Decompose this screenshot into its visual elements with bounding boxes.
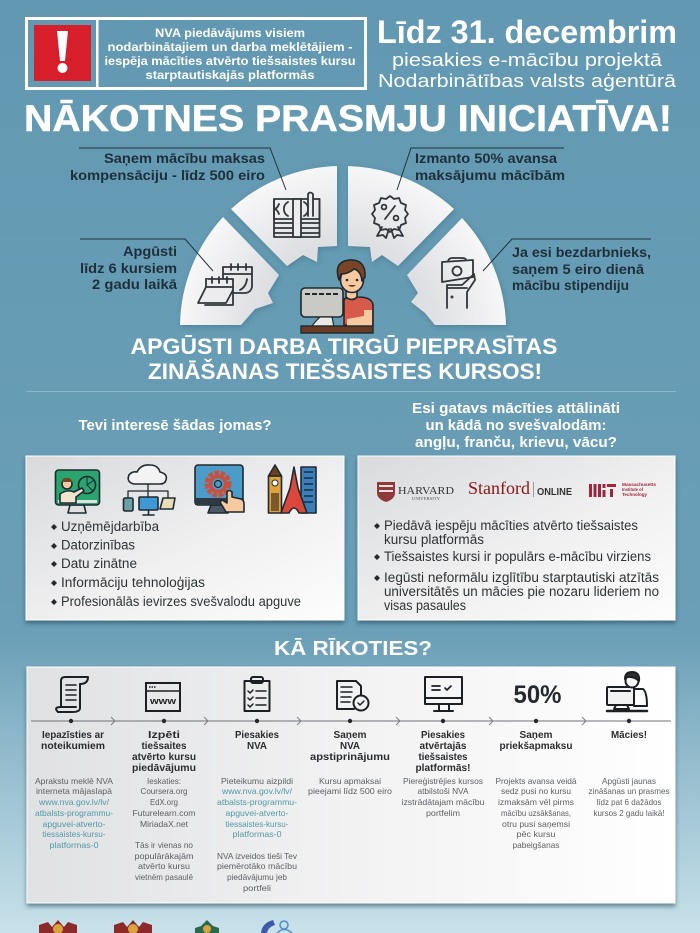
step 2: Coursera.org	[140, 787, 188, 796]
callout lines	[79, 148, 651, 271]
step 1: noteikumiem	[41, 741, 105, 752]
list: benefits: visas pasaules	[384, 598, 466, 613]
step 3: atbalsts-programmu-	[217, 798, 297, 807]
wedge: badge	[348, 166, 454, 266]
step 6: otru pusi saņemsi	[502, 820, 570, 829]
step 3: www.nva.gov.lv/lv/	[221, 787, 293, 796]
list: fields: Informāciju tehnoloģijas	[61, 575, 205, 590]
step 2: Tās ir vienas no	[135, 841, 193, 850]
step 5: Piereģistrējies kursos	[403, 777, 483, 786]
icon: red exclamation mark	[34, 25, 91, 81]
step 3: NVA	[247, 741, 267, 752]
callout: tuition: Saņem mācību maksas	[104, 151, 265, 166]
callout: courses: 2 gadu laikā	[92, 277, 178, 292]
step 1: atbalsts-programmu-	[35, 809, 113, 818]
subheading	[130, 334, 558, 384]
step 1: Iepazīsties ar	[42, 730, 104, 741]
step 6: Saņem	[520, 730, 553, 741]
step 1	[35, 677, 114, 850]
logo: coat of arms 1	[39, 920, 77, 933]
logo: MIT	[589, 482, 657, 497]
step 7: kursos 2 gadu laikā!	[594, 809, 664, 818]
step 4: apstiprinājumu	[310, 752, 390, 763]
step 2: EdX.org	[150, 798, 178, 807]
notice box	[26, 18, 366, 88]
step 7: līdz pat 6 dažādos	[596, 798, 662, 807]
icon: learner at computer	[607, 672, 647, 711]
logo: coat of arms 3	[195, 920, 219, 933]
step 2	[132, 683, 196, 882]
title: NĀKOTNES PRASMJU INICIATĪVA!	[24, 98, 672, 139]
step 3: piedāvājumu jeb	[227, 873, 287, 882]
step 2: atvērto kursu	[138, 862, 190, 871]
person at computer	[301, 260, 373, 333]
notice text: NVA piedāvājums visiem	[155, 28, 305, 40]
step 2: populārākajām	[134, 852, 194, 861]
step 7: Apgūsti jaunas	[602, 777, 656, 786]
icon: calendars	[198, 264, 252, 305]
icon: scroll	[56, 677, 88, 712]
icon: gear on monitor	[195, 465, 244, 513]
step 5: platformās!	[416, 763, 470, 774]
question: languages: un kādā no svešvalodām:	[426, 417, 606, 434]
step 6: mācību uzsākšanas,	[501, 809, 571, 818]
step 6: priekšapmaksu	[500, 741, 572, 752]
callout: tuition: kompensāciju - līdz 500 eiro	[70, 168, 265, 183]
subheading: APGŪSTI DARBA TIRGŪ PIEPRASĪTAS	[130, 334, 558, 359]
step 3: Pieteikumu aizpildi	[221, 777, 293, 786]
panel: fields	[26, 456, 344, 620]
callout: courses: Apgūsti	[123, 244, 177, 259]
icon: clipboard	[244, 677, 270, 711]
list: fields: Datorzinības	[61, 538, 135, 552]
step 5: tiešsaistes	[418, 752, 468, 763]
step 4: pieejami līdz 500 eiro	[308, 787, 392, 796]
step 2: tiešsaites	[142, 741, 187, 752]
icon: browser	[146, 683, 180, 711]
subheading: ZINĀŠANAS TIEŠSAISTES KURSOS!	[148, 359, 542, 384]
callout: tuition	[70, 151, 265, 183]
step 3: platformas-0	[232, 830, 282, 839]
step 1: apguvei-atverto-	[42, 820, 106, 829]
deadline heading: piesakies e-mācību projektā	[392, 49, 663, 70]
panel: universities	[358, 456, 675, 620]
logo: Harvard	[377, 482, 454, 502]
callout: stipend: Ja esi bezdarbnieks,	[512, 245, 651, 260]
list: benefits: Iegūsti neformālu izglītību starptautiski atzītās	[384, 570, 659, 585]
notice text: iespēja mācīties atvērto tiešsaistes kursu	[104, 56, 356, 68]
step 1: www.nva.gov.lv/lv/	[38, 798, 110, 807]
callout: courses: līdz 6 kursiem	[80, 261, 177, 276]
icon: 50 percent: 50%	[514, 681, 562, 709]
list: benefits: Piedāvā iespēju mācīties atvērto tiešsaistes	[384, 518, 638, 533]
step 2: Futurelearn.com	[132, 809, 196, 818]
step 6: pēc kursu	[516, 830, 556, 839]
step 6	[496, 681, 577, 850]
wedge: stipend	[407, 218, 506, 325]
notice text	[104, 28, 356, 82]
icon: monitor	[425, 677, 462, 711]
step 7	[588, 672, 670, 818]
step 3	[217, 677, 298, 893]
heading: how to act: KĀ RĪKOTIES?	[274, 638, 432, 660]
icon: browser: www	[149, 696, 177, 707]
panel: steps	[27, 667, 675, 903]
wedge: money	[231, 166, 337, 266]
icon: presenter	[56, 470, 100, 513]
step 2: piedāvājumu	[132, 763, 196, 774]
step 7: zināšanas un prasmes	[588, 787, 670, 796]
step 1: platformas-0	[50, 841, 99, 850]
wedge: calendar	[180, 217, 279, 325]
list: fields: Uzņēmējdarbība	[61, 519, 159, 534]
step 3: Piesakies	[235, 730, 279, 741]
icon: document with check	[337, 681, 368, 710]
logo: Stanford Online: ONLINE	[537, 487, 572, 498]
step 6: Projekts avansa veidā	[496, 777, 577, 786]
step 5: izstrādātajam mācību	[402, 798, 485, 807]
step 1: Aprakstu meklē NVA	[35, 777, 114, 786]
deadline heading: Nodarbinātības valsts aģentūrā	[378, 70, 677, 91]
step 5: portfelim	[426, 809, 460, 818]
question: languages: Esi gatavs mācīties attālināti	[412, 400, 620, 417]
step 5	[402, 677, 485, 818]
step 5: atbilstoši NVA	[418, 787, 469, 796]
deadline heading	[377, 14, 677, 91]
callout: advance: maksājumu mācībām	[415, 168, 565, 183]
step 4: Kursu apmaksai	[319, 777, 381, 786]
logo: coat of arms 2	[114, 920, 152, 933]
list: benefits: kursu platformās	[384, 532, 484, 547]
callout: stipend	[512, 245, 651, 293]
notice text: nodarbinātajiem un darba meklētājiem -	[108, 42, 353, 54]
callout: stipend: mācību stipendiju	[512, 278, 629, 293]
logo: MIT: Technology	[622, 492, 647, 497]
step 4	[308, 681, 392, 796]
icon: percent badge	[372, 196, 408, 238]
step 5: atvērtajās	[420, 741, 467, 752]
icon: world landmarks	[268, 465, 316, 513]
step 3: NVA izveidos tieši Tev	[217, 852, 298, 861]
list: benefits	[374, 518, 659, 613]
step 2: Izpēti	[148, 730, 180, 741]
callout: advance: Izmanto 50% avansa	[415, 151, 558, 166]
step 3: apguvei-atverto-	[226, 809, 289, 818]
notice text: starptautiskajās platformās	[146, 70, 314, 82]
step 2: MiriadaX.net	[140, 820, 189, 829]
list: fields: Datu zinātne	[61, 556, 137, 571]
step 6: izmaksām vēl pirms	[498, 798, 574, 807]
step 3: tiessaistes-kursu-	[226, 820, 289, 829]
question: languages	[412, 400, 620, 451]
step 4: NVA	[340, 741, 360, 752]
footer logos	[39, 920, 292, 933]
step 2: atvērto kursu	[132, 752, 196, 763]
step 3: piemērotāko mācību	[217, 862, 297, 871]
list: fields: Profesionālās ievirzes svešvalodu apguve	[61, 594, 301, 609]
step 6: pabeigšanas	[512, 841, 560, 850]
step 3: portfeli	[243, 884, 271, 893]
logo: Stanford Online: Stanford	[468, 478, 530, 498]
logo: Stanford Online	[468, 478, 572, 498]
logo: Harvard: HARVARD	[398, 485, 454, 497]
callout: advance	[415, 151, 565, 183]
logo: agency mark	[261, 920, 292, 933]
logo: MIT: Institute of	[622, 487, 643, 492]
timeline	[31, 717, 671, 725]
list: benefits: universitātēs un mācies pie nozaru lideriem no	[384, 584, 659, 599]
step 5: Piesakies	[421, 730, 465, 741]
step 4: Saņem	[334, 730, 367, 741]
icon: cloud network	[124, 465, 175, 515]
semicircle infographic	[70, 148, 651, 333]
step 1: interneta mājaslapā	[36, 787, 112, 796]
question: fields: Tevi interesē šādas jomas?	[78, 417, 272, 434]
question: languages: angļu, franču, krievu, vācu?	[415, 434, 617, 451]
icon: money	[274, 192, 320, 237]
icon: hand with banknote	[442, 258, 475, 308]
logo: Harvard: UNIVERSITY	[412, 496, 441, 501]
list: fields	[51, 519, 301, 609]
list: benefits: Tiešsaistes kursi ir populārs e-mācību virziens	[384, 549, 651, 564]
logo: MIT: Massachusetts	[622, 482, 657, 487]
step 2: Ieskaties:	[147, 777, 181, 786]
callout: courses	[80, 244, 178, 292]
step 6: sedz pusi no kursu	[501, 787, 571, 796]
callout: stipend: saņem 5 eiro dienā	[512, 262, 645, 277]
step 7: Mācies!	[611, 730, 647, 741]
step 2: vietnēm pasaulē	[135, 873, 193, 882]
deadline heading: Līdz 31. decembrim	[377, 14, 677, 50]
step 1: tiessaistes-kursu-	[42, 830, 106, 839]
